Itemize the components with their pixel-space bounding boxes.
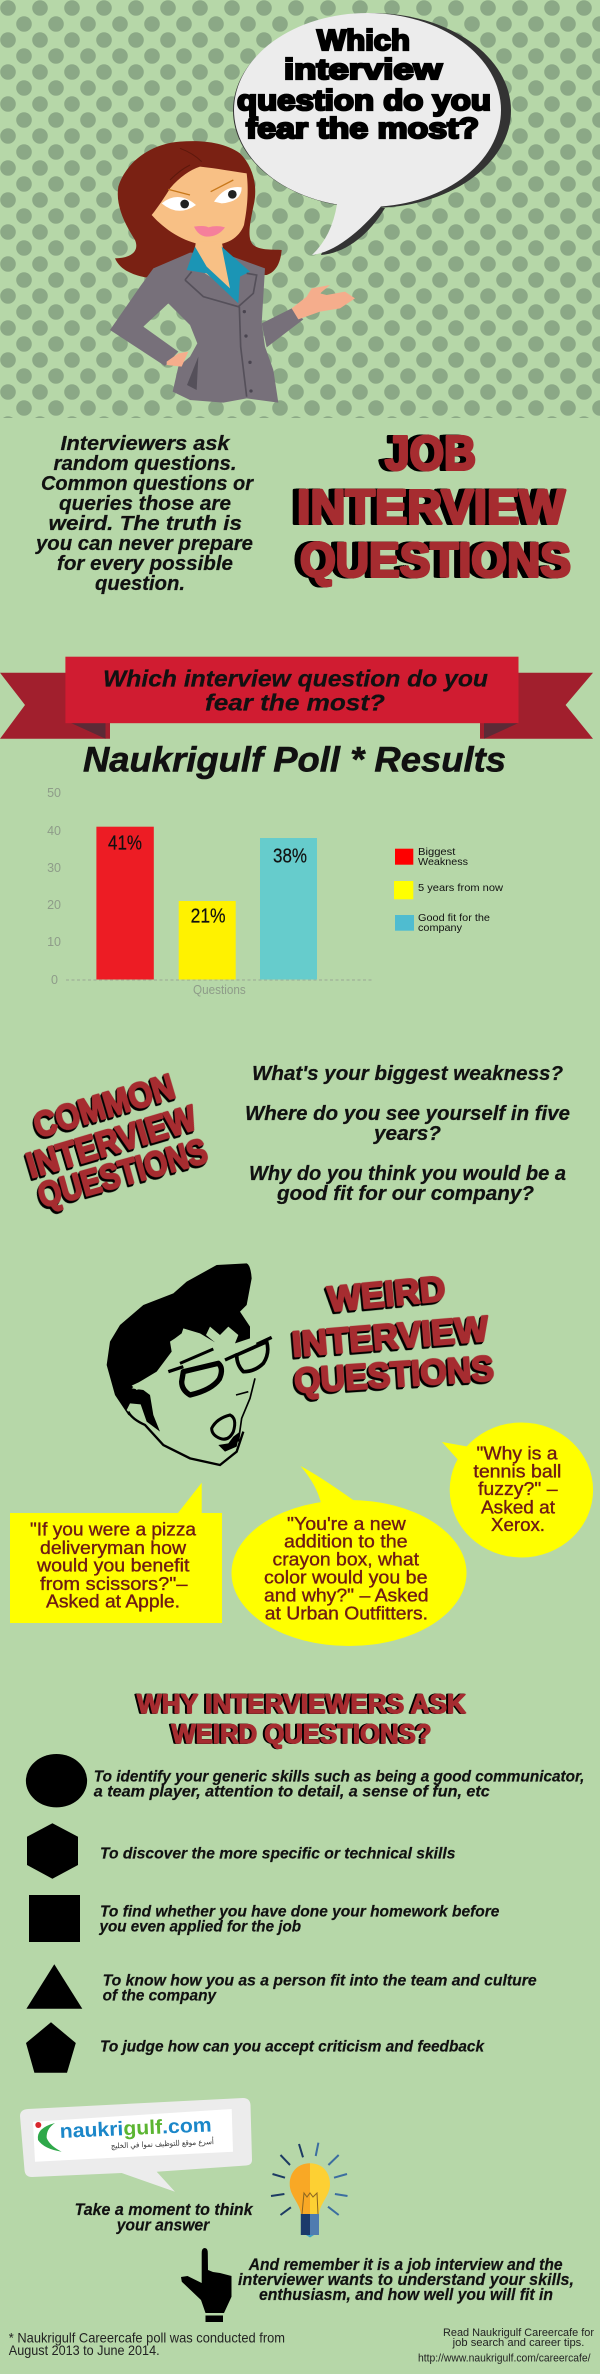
icon: hexagon	[27, 1823, 78, 1879]
reason 4: of the company	[103, 1988, 217, 2005]
callout: tennis ball question at Xerox: tennis ball	[473, 1461, 561, 1481]
common questions list: good fit for our company?	[276, 1183, 534, 1205]
bubble heading text: interview	[284, 54, 443, 86]
intro text block	[35, 433, 254, 595]
logo wordmark: naukrigulf.com	[59, 2114, 212, 2143]
y axis labels: 10	[47, 935, 61, 949]
callout: pizza question at Apple: would you benefit	[36, 1556, 189, 1576]
legend	[394, 846, 503, 934]
bar: good fit 38%	[260, 838, 317, 980]
logo mark	[35, 2122, 62, 2152]
ribbon text: fear the most?	[205, 690, 385, 716]
common interview questions heading	[22, 1067, 212, 1216]
why interviewers ask weird questions heading: WEIRD QUESTIONS?	[172, 1719, 432, 1749]
naukrigulf logo speech bubble	[20, 2098, 252, 2192]
poll results heading: Naukrigulf Poll * Results	[83, 741, 506, 780]
common interview questions heading: QUESTIONS	[34, 1132, 212, 1216]
reason 5	[26, 2022, 485, 2073]
reason 1: To identify your generic skills such as being a good communicator,	[94, 1769, 584, 1786]
y axis labels: 20	[47, 898, 61, 912]
callout: tennis ball question at Xerox: Xerox.	[491, 1515, 545, 1535]
intro text block: weird. The truth is	[48, 513, 242, 535]
common questions list: Why do you think you would be a	[249, 1163, 566, 1185]
icon: light bulb	[271, 2143, 348, 2238]
icon: pointing hand	[181, 2248, 232, 2322]
y axis labels: 30	[47, 861, 61, 875]
reason 4: To know how you as a person fit into the team and culture	[103, 1973, 537, 1990]
reason 2	[27, 1823, 456, 1879]
weird interview questions heading: INTERVIEW	[290, 1310, 490, 1365]
legend: 5 years from now	[418, 882, 503, 894]
job interview questions heading: INTERVIEW	[297, 482, 566, 534]
y axis labels: 40	[47, 824, 61, 838]
source credit: Read Naukrigulf Careercafe for	[443, 2327, 594, 2339]
common questions list: Where do you see yourself in five	[245, 1103, 570, 1125]
callout: pizza question at Apple: "If you were a pizza	[30, 1520, 197, 1540]
ribbon text: Which interview question do you	[103, 666, 488, 692]
closing advice text: And remember it is a job interview and the	[248, 2256, 563, 2274]
footnote: August 2013 to June 2014.	[9, 2342, 160, 2358]
intro text block: random questions.	[54, 453, 236, 475]
reason 3	[29, 1895, 500, 1942]
y axis labels	[47, 786, 61, 987]
reason 3: you even applied for the job	[99, 1919, 302, 1936]
callout: tennis ball question at Xerox: Asked at	[481, 1497, 555, 1517]
legend: Good fit for the	[418, 912, 490, 924]
footnote: * Naukrigulf Careercafe poll was conducted from	[9, 2330, 285, 2346]
weird interview questions heading	[290, 1270, 495, 1401]
take a moment text	[75, 2200, 254, 2235]
bar chart	[47, 786, 503, 997]
reason 3: To find whether you have done your homework before	[100, 1904, 500, 1921]
bubble heading text: question do you	[237, 85, 491, 117]
callout: tennis ball question at Xerox	[442, 1422, 593, 1558]
woman in grey suit	[110, 141, 355, 403]
callout: tennis ball question at Xerox: fuzzy?" –	[478, 1479, 558, 1499]
callout: crayon box question at Urban Outfitters	[232, 1466, 466, 1646]
common interview questions heading: COMMON	[29, 1067, 179, 1146]
speech bubble with question	[233, 13, 511, 255]
weird interview questions heading: QUESTIONS	[293, 1349, 495, 1401]
callout: crayon box question at Urban Outfitters: color would you be	[264, 1567, 428, 1587]
closing advice text	[238, 2256, 574, 2304]
callout: pizza question at Apple: deliveryman how	[40, 1538, 187, 1558]
why interviewers ask weird questions heading: WHY INTERVIEWERS ASK	[137, 1689, 466, 1719]
bar: good fit 38%: 38%	[273, 845, 307, 867]
intro text block: Common questions or	[41, 473, 254, 495]
bubble heading text	[237, 25, 491, 145]
intro text block: question.	[95, 573, 185, 595]
common interview questions heading: INTERVIEW	[22, 1099, 201, 1186]
closing advice text: enthusiasm, and how well you will fit in	[259, 2286, 553, 2304]
legend: Biggest	[418, 846, 455, 858]
y axis labels: 50	[47, 786, 61, 800]
why interviewers ask weird questions heading	[137, 1689, 466, 1749]
source credit: job search and career tips.	[452, 2337, 584, 2349]
logo tagline: أسرع موقع للتوظيف نموا في الخليج	[111, 2136, 214, 2150]
illustration: man with glasses	[107, 1263, 272, 1465]
reason 4	[26, 1964, 537, 2009]
job interview questions heading: QUESTIONS	[300, 534, 571, 588]
callout: tennis ball question at Xerox: "Why is a	[476, 1443, 559, 1463]
footnote	[9, 2330, 285, 2358]
ribbon banner	[0, 657, 593, 739]
intro text block: Interviewers ask	[60, 433, 230, 455]
icon: square	[29, 1895, 80, 1942]
job interview questions heading	[297, 428, 571, 588]
intro text block: you can never prepare	[35, 533, 253, 555]
legend: Weakness	[418, 856, 468, 868]
intro text block: for every possible	[57, 553, 233, 575]
reason 2: To discover the more specific or technical skills	[100, 1845, 456, 1862]
reason 1	[26, 1754, 584, 1807]
take a moment text: Take a moment to think	[75, 2200, 254, 2219]
ribbon text	[103, 666, 488, 716]
icon: triangle	[26, 1964, 82, 2009]
polka dot header background	[0, 0, 600, 418]
callout: crayon box question at Urban Outfitters: addition to the	[284, 1532, 408, 1552]
intro text block: queries those are	[59, 493, 231, 515]
callout: crayon box question at Urban Outfitters: "You're a new	[287, 1514, 407, 1534]
reason 5: To judge how can you accept criticism and feedback	[100, 2039, 485, 2056]
bar: 5 years from now 21%: 21%	[191, 905, 226, 927]
callout: crayon box question at Urban Outfitters: crayon box, what	[272, 1550, 419, 1570]
icon: circle	[26, 1754, 87, 1807]
bubble heading text: fear the most?	[246, 113, 479, 145]
job interview questions heading: JOB	[385, 428, 476, 480]
take a moment text: your answer	[116, 2216, 211, 2235]
reason 1: a team player, attention to detail, a sense of fun, etc	[94, 1784, 490, 1801]
common questions list: What's your biggest weakness?	[252, 1063, 563, 1085]
closing advice text: interviewer wants to understand your skills,	[238, 2271, 574, 2289]
bar: 5 years from now 21%	[179, 901, 236, 980]
source credit	[418, 2327, 594, 2365]
callout: pizza question at Apple: Asked at Apple.	[46, 1592, 180, 1612]
x axis label: Questions	[193, 983, 246, 997]
source credit: http://www.naukrigulf.com/careercafe/	[418, 2353, 591, 2365]
bar: biggest weakness 41%: 41%	[108, 832, 142, 854]
common questions list: years?	[373, 1123, 441, 1145]
common questions list	[245, 1063, 570, 1205]
y axis labels: 0	[51, 973, 58, 987]
callout: pizza question at Apple: from scissors?"–	[40, 1574, 188, 1594]
bubble heading text: Which	[317, 25, 410, 57]
weird interview questions heading: WEIRD	[326, 1270, 447, 1320]
bar: biggest weakness 41%	[96, 827, 154, 980]
callout: crayon box question at Urban Outfitters: at Urban Outfitters.	[265, 1603, 428, 1623]
icon: pentagon	[26, 2022, 76, 2073]
callout: crayon box question at Urban Outfitters: and why?" – Asked	[264, 1586, 429, 1606]
callout: pizza question at Apple	[10, 1483, 222, 1623]
legend: company	[418, 922, 463, 934]
